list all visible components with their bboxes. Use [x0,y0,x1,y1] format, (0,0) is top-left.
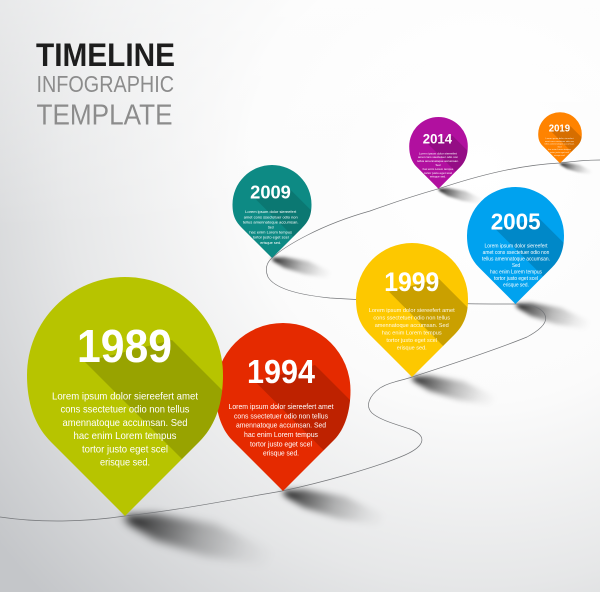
pin: 2005: amet cons ssectetuer odio non [483,250,550,256]
pin: 2014: hac enim Lorem tempus [423,167,454,171]
pin: 2005: tellus amennatoque accumsan. [482,256,550,262]
pin: 1994: amennatoque accumsan. Sed [236,421,326,430]
pin: 1994 [218,323,350,491]
pin: 1989: cons ssectetuer odio non tellus [60,405,190,416]
pin: 1989: erisque sed. [100,458,150,468]
pin: 1994: tortor justo eget scel [250,439,312,448]
pin: 1989: hac enim Lorem tempus [74,431,176,442]
pin: 2005: erisque sed. [503,283,529,289]
pin: 2019: hac enim Lorem tempus [548,148,572,151]
pin: 2014: tellus amennatoque accumsan. [417,159,459,163]
pin: 2019: tortor justo eget scel [550,151,569,154]
pin: 2009: erisque sed. [260,240,281,245]
pin: 2005: 2005 [491,208,541,234]
pin: 1994: hac enim Lorem tempus [244,430,318,439]
pin: 2014: amet cons ssectetuer odio non [418,155,458,159]
title: TEMPLATE [36,100,172,132]
title [36,37,175,132]
pin: 2014 [409,117,468,189]
pin: 2009: tortor justo eget scel [253,235,289,240]
pin: 2009: Sed [268,224,274,230]
pin: 2005: Lorem ipsum dolor siereefert [484,243,548,249]
pin: 2019 [538,112,582,164]
pin: 1989 [27,277,223,516]
pin: 1989: tortor justo eget scel [82,444,168,455]
pin: 2005: hac enim Lorem tempus [490,270,542,276]
pin: 2009: 2009 [250,182,291,202]
pin: 1989: Lorem ipsum dolor siereefert amet [52,392,198,402]
pin: 2009: amet cons ssectetuer odio non [244,214,298,219]
pin: 2005 [467,187,564,304]
pin: 2019: tellus amennatoque accumsan. [544,143,575,146]
pin: 2019: Sed [558,146,562,148]
pin: 1994: Lorem ipsum dolor siereefert amet [228,402,334,411]
pin: 2005: tortor justo eget scel [494,276,538,282]
pin: 1994: erisque sed. [263,449,299,458]
pin: 2009: tellus amennatoque accumsan. [243,219,299,224]
pin: 2019: 2019 [549,123,570,134]
pin: 2019: Lorem ipsum dolor siereefert [546,137,574,140]
pin: 1999: Lorem ipsum dolor siereefert amet [369,308,455,314]
pin: 1999: cons ssectetuer odio non tellus [373,316,450,322]
pin: 1999 [356,243,468,377]
pin: 1999: hac enim Lorem tempus [382,330,442,336]
pin: 1999: 1999 [384,267,439,297]
pin: 1994: 1994 [247,353,316,390]
pin: 2005: Sed [512,263,520,269]
pin: 1999: erisque sed. [397,346,427,352]
pin: 1989: amennatoque accumsan. Sed [62,418,188,429]
pin: 2019: amet cons ssectetuer odio non [545,140,575,143]
title: TIMELINE [36,37,175,73]
pin: 2019: erisque sed. [554,154,565,157]
pin: 2009 [232,165,312,258]
pin: 2014: tortor justo eget scel [424,171,452,175]
pin: 2014: Sed [436,163,441,167]
pin: 2014: erisque sed. [430,175,446,179]
pin: 2014: Lorem ipsum dolor siereefert [419,151,457,155]
pin: 1999: amennatoque accumsan. Sed [375,323,449,329]
pin: 2009: hac enim Lorem tempus [249,230,292,235]
pin: 1999: tortor justo eget scel [386,338,437,344]
pin: 1989: 1989 [77,320,172,372]
title: INFOGRAPHIC [36,71,174,97]
pin: 1994: cons ssectetuer odio non tellus [234,411,328,420]
timeline curve [0,160,600,521]
pin shadows [123,163,593,566]
pin: 2014: 2014 [423,130,452,146]
pin: 2009: Lorem ipsum dolor siereefert [245,209,297,214]
